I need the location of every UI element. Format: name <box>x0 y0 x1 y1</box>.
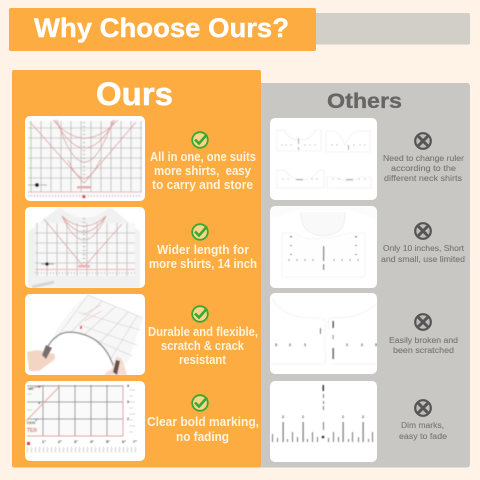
ours text 2 <box>149 243 257 271</box>
ours card 2: wider ruler on shirt <box>25 207 145 288</box>
others card 4: dim marks: 1 <box>342 414 345 419</box>
others card 3: enlarged ruler detail: 3 <box>275 342 278 347</box>
others text 2: Only 10 inches, Short <box>383 243 465 253</box>
ours card 4: bold marking close-up: 3 <box>127 399 130 404</box>
ours card 4: bold marking close-up: 4" <box>90 439 94 444</box>
others text 4: easy to fade <box>399 431 447 441</box>
others text 1: different neck shirts <box>384 173 462 183</box>
ours text 4: no fading <box>176 430 229 444</box>
ours text 4: Clear bold marking, <box>147 415 259 429</box>
others text 4: Dim marks, <box>401 420 444 430</box>
others card 4: dim marks <box>270 381 377 462</box>
ours text 3: Durable and flexible, <box>148 325 258 339</box>
ours text 4 <box>147 415 259 444</box>
ours card 4: bold marking close-up: 3" <box>74 439 78 444</box>
others text 2 <box>381 243 465 264</box>
ours text 3: resistant <box>179 353 227 367</box>
others text 4 <box>399 420 447 441</box>
ours card 4: bold marking close-up: 7" <box>133 439 137 444</box>
ours text 1: All in one, one suits <box>150 150 256 164</box>
others card 4: dim marks: 1 <box>302 414 305 419</box>
others card 2: shirt with ruler <box>270 206 377 288</box>
others heading: Others <box>327 90 402 113</box>
ours card 4: bold marking close-up: 2 <box>127 416 130 421</box>
ours card 4: bold marking close-up: 5" <box>106 439 110 444</box>
others icon 3: cross <box>415 314 431 330</box>
ours text 1 <box>150 150 256 192</box>
others card 3: enlarged ruler detail: 3 <box>375 342 378 347</box>
ours heading: Ours <box>96 76 173 112</box>
others icon 1: cross <box>415 133 431 149</box>
ours text 1: more shirts, easy <box>154 164 251 178</box>
ours card 4: bold marking close-up: 60 <box>29 386 34 391</box>
others card 3: enlarged ruler detail: 2 <box>361 342 364 347</box>
ours card 4: bold marking close-up: 6" <box>122 439 126 444</box>
others card 1: four neck rulers <box>270 118 377 200</box>
others card 4: dim marks: 2 <box>282 414 285 419</box>
title banner: Why Choose Ours? <box>34 13 289 43</box>
header grey bar <box>300 13 470 44</box>
ours card 4: bold marking close-up: TER <box>27 428 37 434</box>
ours icon 4: green check <box>192 395 208 411</box>
ours card 3: flexible ruler in hands <box>25 294 145 375</box>
others text 3: Easily broken and <box>389 335 458 345</box>
others text 3: been scratched <box>393 345 454 355</box>
others icon 4: cross <box>415 400 431 416</box>
others text 1: Need to change ruler <box>383 153 464 163</box>
others icon 2: cross <box>415 223 431 239</box>
others card 4: dim marks: 2 <box>362 414 365 419</box>
ours card 4: bold marking close-up <box>25 381 145 461</box>
ours card 4: bold marking close-up: 2" <box>58 439 62 444</box>
ours card 4: bold marking close-up: 1" <box>42 439 46 444</box>
others text 2: and small, use limited <box>381 254 465 264</box>
others text 1: according to the <box>391 163 456 173</box>
ours text 3: scratch & crack <box>161 339 244 353</box>
panel: others <box>250 83 470 468</box>
others card 3: enlarged ruler detail: 1 <box>346 342 349 347</box>
ours text 1: to carry and store <box>152 178 253 192</box>
ours text 3 <box>148 325 258 367</box>
ours icon 3: green check <box>192 306 208 322</box>
ours card 1: all-in-one ruler <box>25 116 145 201</box>
ours icon 1: green check <box>192 132 208 148</box>
others card 3: enlarged ruler detail: 1 <box>304 342 307 347</box>
ours card 4: bold marking close-up: 4 <box>127 383 130 388</box>
ours card 4: bold marking close-up: CEN <box>27 420 35 425</box>
ours text 2: Wider length for <box>157 243 249 257</box>
others text 1 <box>383 153 464 183</box>
others card 3: enlarged ruler detail: 2 <box>289 342 292 347</box>
ours icon 2: green check <box>192 224 208 240</box>
ours card 4: bold marking close-up: 3" <box>38 400 42 405</box>
others card 3: enlarged ruler detail <box>270 293 378 374</box>
panel: ours <box>12 70 261 468</box>
ours card 4: bold marking close-up: 2" <box>35 417 39 422</box>
title banner <box>9 8 316 51</box>
others text 3 <box>389 335 458 355</box>
ours card 4: bold marking close-up: 4" <box>38 384 42 389</box>
ours text 2: more shirts, 14 inch <box>149 257 257 271</box>
